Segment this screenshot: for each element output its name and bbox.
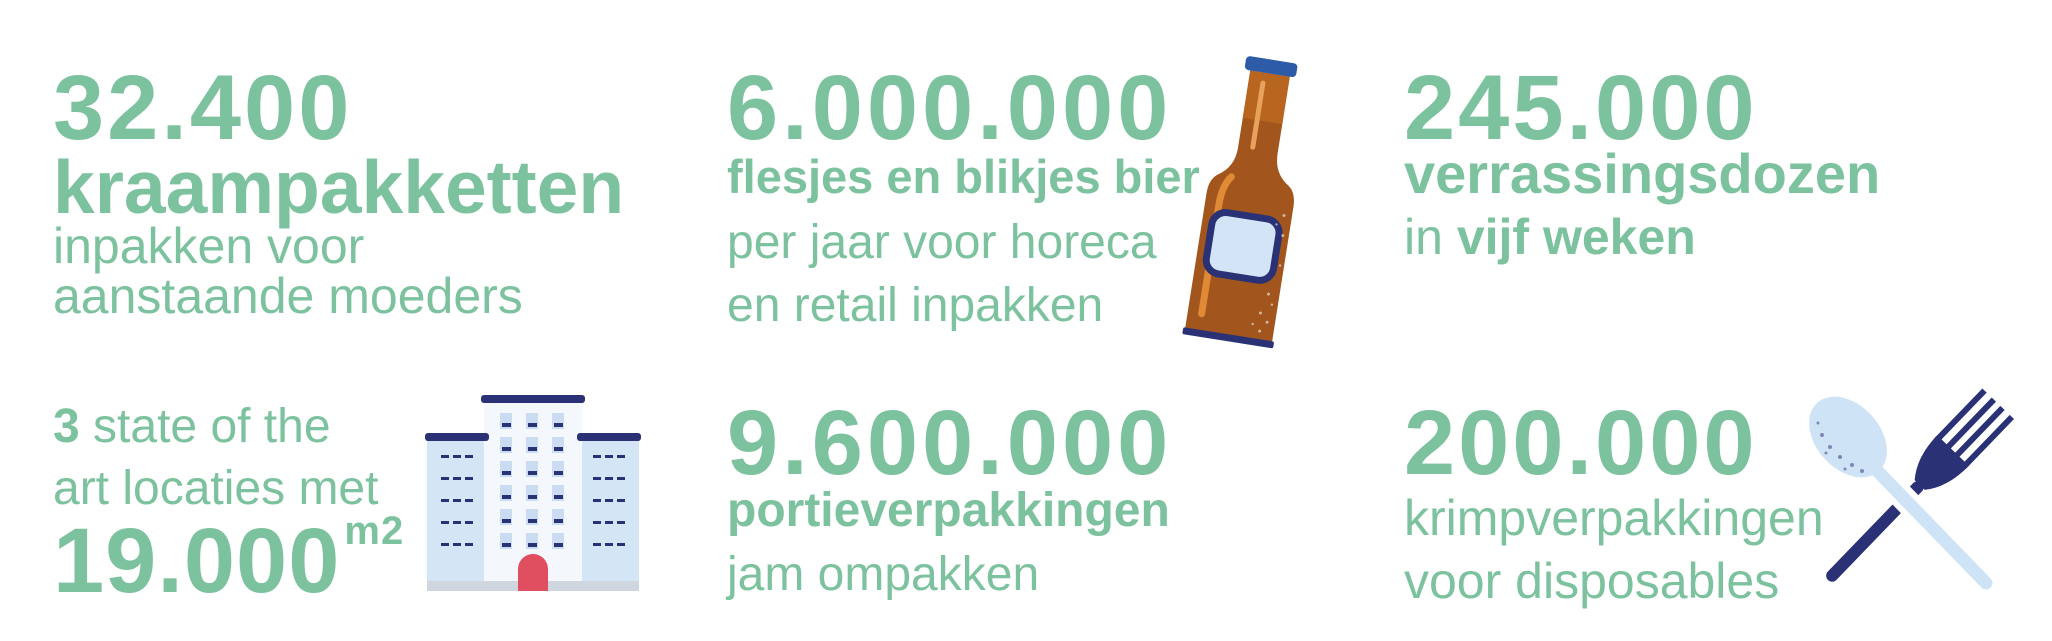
big number: 200.000: 200.000 xyxy=(1404,392,1758,494)
panel: bier xyxy=(727,57,1200,332)
text: 3 state of the art locaties met: art locaties met xyxy=(53,462,378,515)
icon: building xyxy=(425,395,641,591)
text: inpakken voor aanstaande moeders xyxy=(53,218,523,324)
panel: portieverpakkingen xyxy=(726,392,1172,601)
text: jam ompakken: jam ompakken xyxy=(727,548,1039,601)
heading: kraampakketten: kraampakketten xyxy=(53,145,624,229)
panel: locaties xyxy=(53,400,404,612)
panel: krimpverpakkingen xyxy=(1404,392,1824,609)
text: inpakken voor aanstaande moeders: inpakken voor xyxy=(53,218,364,274)
big number: 19.000 m2: 19.000m2 xyxy=(53,509,404,612)
text: krimpverpakkingen voor disposables: voor disposables xyxy=(1404,553,1779,609)
text: in vijf weken: in vijf weken xyxy=(1404,209,1696,265)
text: inpakken voor aanstaande moeders: aanstaande moeders xyxy=(53,268,523,324)
heading: verrassingsdozen: verrassingsdozen xyxy=(1404,142,1880,205)
icon: spoon and fork xyxy=(1809,388,2014,590)
big number: 9.600.000: 9.600.000 xyxy=(727,392,1172,494)
heading: flesjes en blikjes bier: flesjes en blikjes bier xyxy=(727,150,1200,203)
big number: 32.400: 32.400 xyxy=(53,57,352,159)
text: 3 state of the art locaties met: 3 state of the xyxy=(53,400,331,453)
text: per jaar voor horeca en retail inpakken xyxy=(727,216,1157,332)
text: 3 state of the art locaties met xyxy=(53,400,378,515)
text: per jaar voor horeca en retail inpakken: en retail inpakken xyxy=(727,279,1103,332)
text: krimpverpakkingen voor disposables xyxy=(1404,490,1824,609)
heading: portieverpakkingen: portieverpakkingen xyxy=(727,484,1170,537)
panel: kraampakketten xyxy=(53,57,624,324)
icon: beer bottle xyxy=(1182,56,1298,348)
text: krimpverpakkingen voor disposables: krimpverpakkingen xyxy=(1404,490,1824,546)
text: per jaar voor horeca en retail inpakken: per jaar voor horeca xyxy=(727,216,1157,269)
panel: verrassingsdozen xyxy=(1404,57,1880,265)
big number: 245.000: 245.000 xyxy=(1404,57,1758,159)
big number: 6.000.000: 6.000.000 xyxy=(727,57,1172,159)
